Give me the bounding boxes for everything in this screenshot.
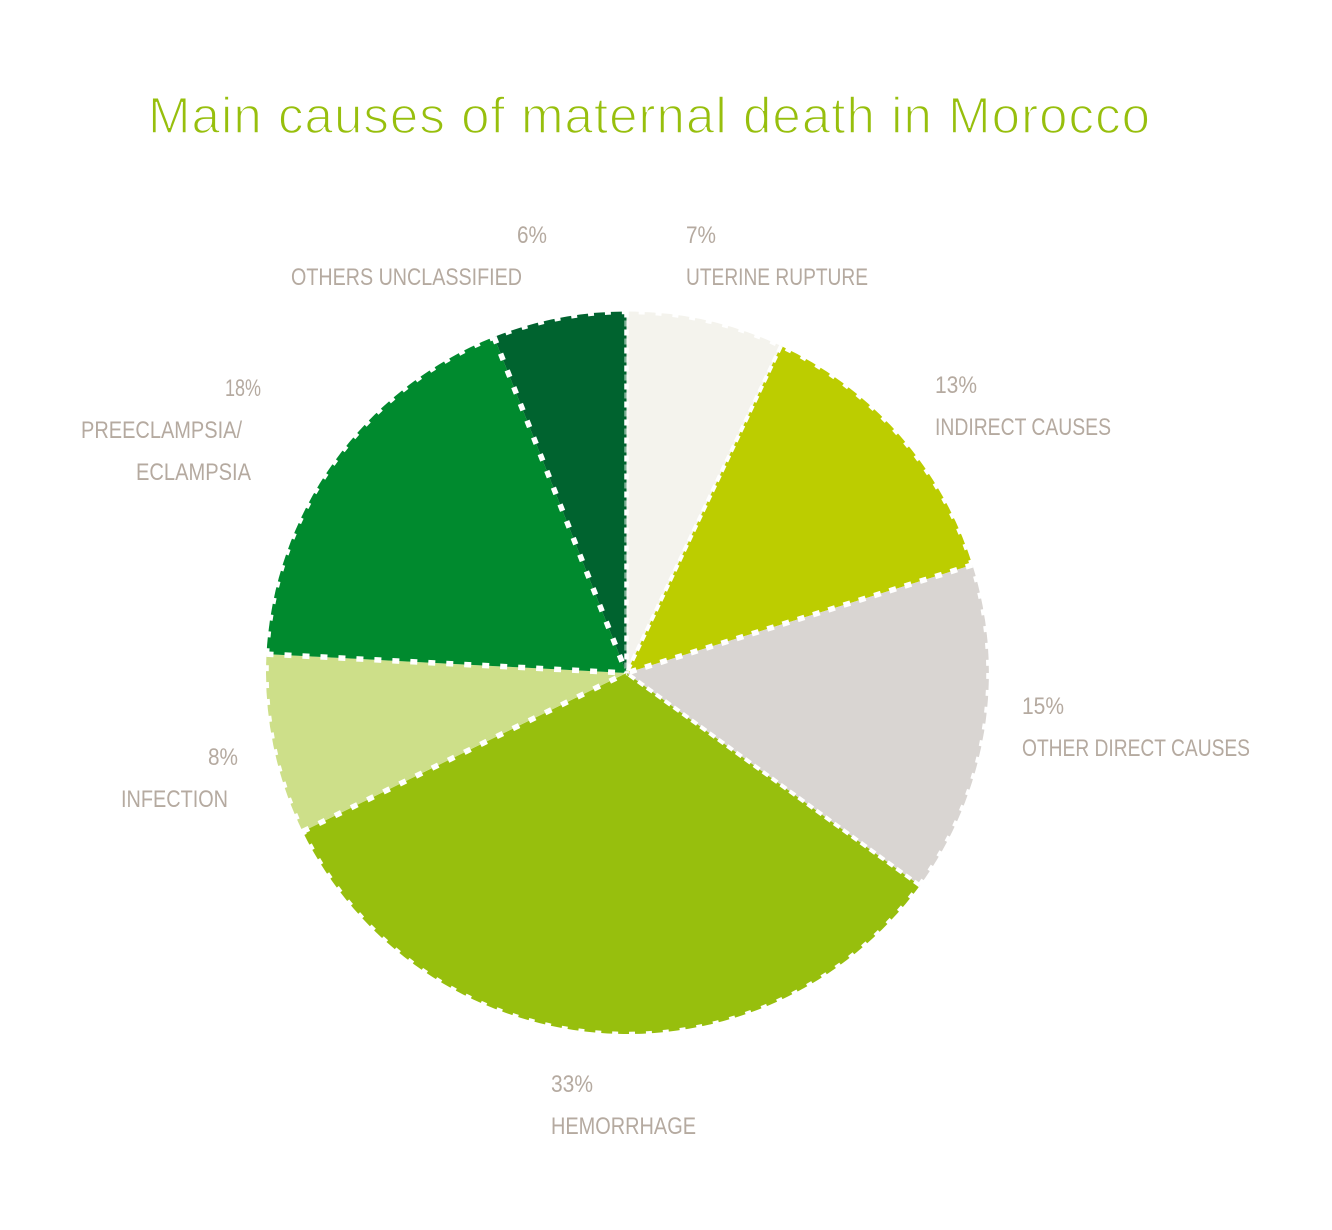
dashed slice dividers <box>266 312 972 886</box>
label: others unclassified: 6% <box>517 222 547 249</box>
slice: hemorrhage 33% <box>303 673 920 1034</box>
label: preeclampsia/eclampsia: ECLAMPSIA <box>136 459 251 486</box>
label: hemorrhage: 33% <box>551 1071 593 1098</box>
label: other direct causes: OTHER DIRECT CAUSES <box>1022 735 1250 762</box>
label: preeclampsia/eclampsia: 18% <box>225 375 261 402</box>
label: others unclassified: OTHERS UNCLASSIFIED <box>291 264 522 291</box>
pie chart <box>266 311 990 1035</box>
label: uterine rupture: UTERINE RUPTURE <box>686 264 868 291</box>
label: uterine rupture: 7% <box>686 222 716 249</box>
label: other direct causes: 15% <box>1022 693 1064 720</box>
slice: others unclassified 6% <box>494 312 626 673</box>
label: others unclassified <box>291 222 547 291</box>
title: Main causes of maternal death in Morocco <box>148 87 1150 144</box>
label: infection <box>121 744 238 813</box>
label: preeclampsia/eclampsia: PREECLAMPSIA/ <box>81 417 242 444</box>
label: preeclampsia/eclampsia <box>81 375 261 486</box>
label: uterine rupture <box>686 222 868 291</box>
label: hemorrhage: HEMORRHAGE <box>551 1113 696 1140</box>
label: infection: INFECTION <box>121 786 228 813</box>
label: indirect causes <box>935 372 1111 441</box>
label: hemorrhage <box>551 1071 696 1140</box>
dashed outer edge <box>266 311 990 1035</box>
slice: preeclampsia/eclampsia 18% <box>266 337 626 673</box>
label: indirect causes: INDIRECT CAUSES <box>935 414 1111 441</box>
label: infection: 8% <box>208 744 238 771</box>
label: indirect causes: 13% <box>935 372 977 399</box>
slice: other direct causes 15% <box>626 565 989 886</box>
slice: infection 8% <box>266 654 626 832</box>
slice: indirect causes 13% <box>626 346 972 673</box>
label: other direct causes <box>1022 693 1250 762</box>
slice: uterine rupture 7% <box>626 311 781 673</box>
